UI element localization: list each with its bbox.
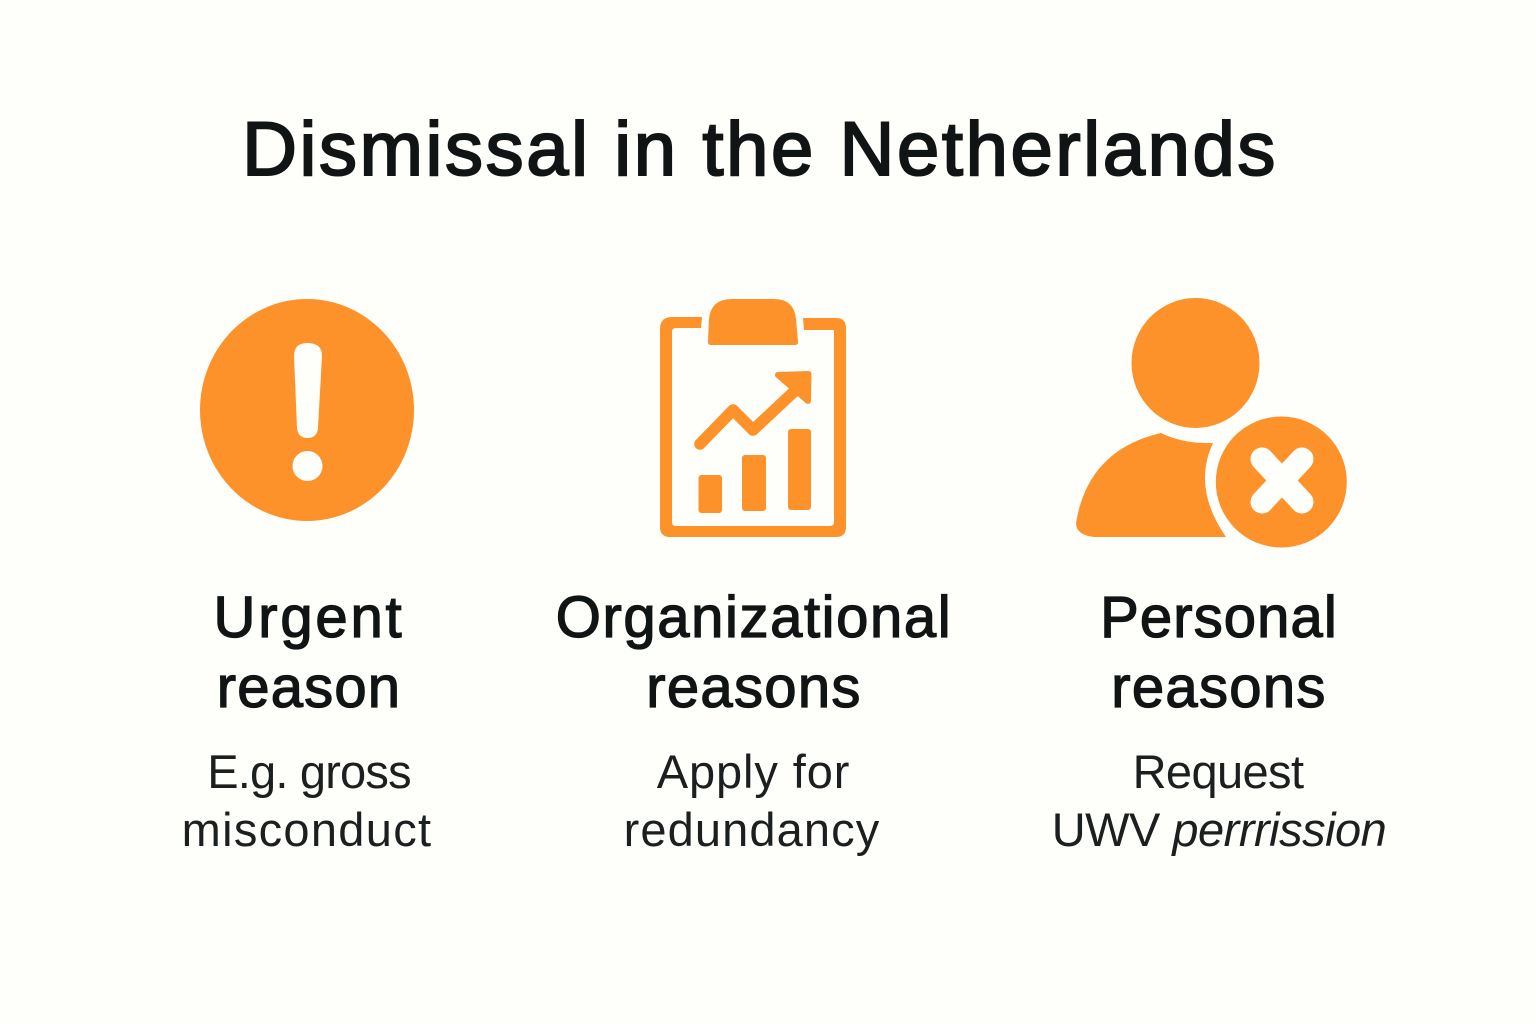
heading: personal reasons: Personal bbox=[1100, 585, 1338, 650]
text: personal reasons detail bbox=[1052, 745, 1386, 856]
heading: organizational reasons: Organizational bbox=[556, 585, 952, 650]
text: organizational reasons detail: Apply for bbox=[657, 745, 850, 798]
heading: organizational reasons: reasons bbox=[646, 655, 862, 720]
text: personal reasons detail: Request bbox=[1133, 745, 1303, 798]
heading: personal reasons: reasons bbox=[1111, 655, 1327, 720]
icon: person with x badge bbox=[1076, 298, 1347, 548]
heading: urgent reason bbox=[214, 585, 404, 720]
heading: urgent reason: reason bbox=[217, 655, 401, 720]
icon: clipboard with chart bbox=[660, 299, 846, 537]
text: personal reasons detail: UWV perrrission bbox=[1052, 803, 1386, 856]
heading: organizational reasons bbox=[556, 585, 952, 720]
text: organizational reasons detail bbox=[624, 745, 880, 856]
icon: exclamation circle bbox=[200, 299, 414, 521]
text: urgent reason detail: misconduct bbox=[182, 803, 432, 856]
text: urgent reason detail bbox=[182, 745, 432, 856]
text: organizational reasons detail: redundancy bbox=[624, 803, 880, 856]
text: urgent reason detail: E.g. gross bbox=[207, 745, 411, 798]
title: Dismissal in the Netherlands bbox=[242, 107, 1278, 192]
heading: personal reasons bbox=[1100, 585, 1338, 720]
heading: urgent reason: Urgent bbox=[214, 585, 404, 650]
